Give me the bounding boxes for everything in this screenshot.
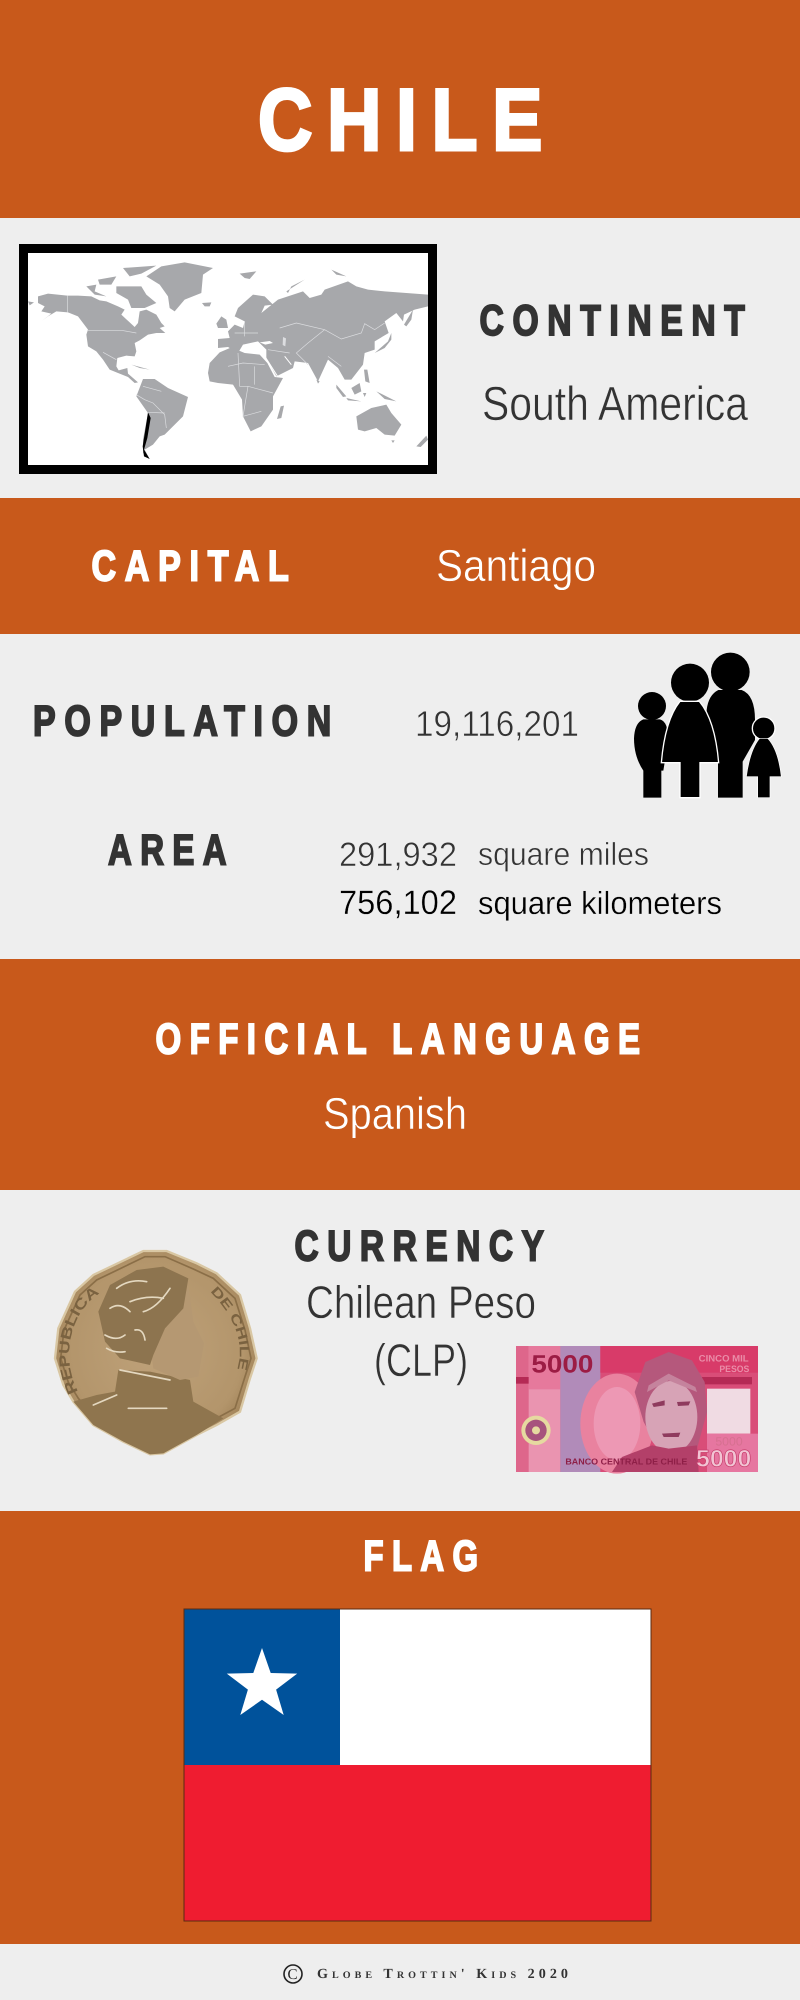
banknote: 5000 [531,1350,593,1378]
area in square miles [339,836,649,874]
world map [24,248,432,470]
panel: capital [0,498,800,634]
area heading: AREA [108,826,235,874]
panel: continent [0,218,800,498]
capital value: Santiago [436,540,596,591]
flag star [227,1648,297,1715]
panel: footer [0,1944,800,2000]
currency heading: CURRENCY [294,1222,552,1270]
banknote: PESOS [719,1364,749,1374]
area in square kilometers: square kilometers [478,885,722,921]
coin bust: neck and face [150,1285,204,1380]
continent value: South America [482,378,748,431]
banknote: 5000 [715,1434,743,1448]
panel: official language [0,959,800,1190]
banknote flower [521,1416,551,1445]
seas [260,341,273,345]
banknote: BANCO CENTRAL DE CHILE [565,1456,687,1466]
area in square kilometers: 756,102 [339,884,457,922]
area in square miles: square miles [478,836,649,872]
currency value: (CLP) [374,1334,468,1386]
banknote: CINCO MIL [699,1353,749,1363]
copyright icon: C [288,1967,298,1983]
panel: title band [0,0,800,218]
language heading: OFFICIAL LANGUAGE [156,1016,648,1064]
population heading: POPULATION [33,698,340,746]
chile highlight [143,412,151,459]
currency value [306,1276,536,1386]
coin: DE CHILE [211,1286,249,1370]
banknote portrait [635,1352,707,1449]
population value: 19,116,201 [415,703,579,744]
flag heading: FLAG [364,1532,486,1580]
currency value: Chilean Peso [306,1276,536,1328]
panel: population and area [0,634,800,959]
area in square miles: 291,932 [339,836,457,874]
coin bust: hair [98,1267,188,1365]
icon: family [634,653,781,798]
banknote [516,1346,758,1474]
coin: REPUBLICA [59,1288,100,1395]
copyright icon [284,1965,302,1983]
footer credit: Globe Trottin' Kids 2020 [317,1967,572,1982]
panel: currency [54,1222,758,1474]
area in square kilometers [339,884,722,922]
panel: flag [0,1511,800,1944]
coin bust: jacket [73,1370,223,1454]
coin [54,1250,258,1456]
banknote: 5000 [696,1445,751,1472]
title: CHILE [258,70,557,169]
chilean flag [184,1609,651,1921]
capital heading: CAPITAL [92,542,298,590]
language value: Spanish [323,1088,467,1139]
